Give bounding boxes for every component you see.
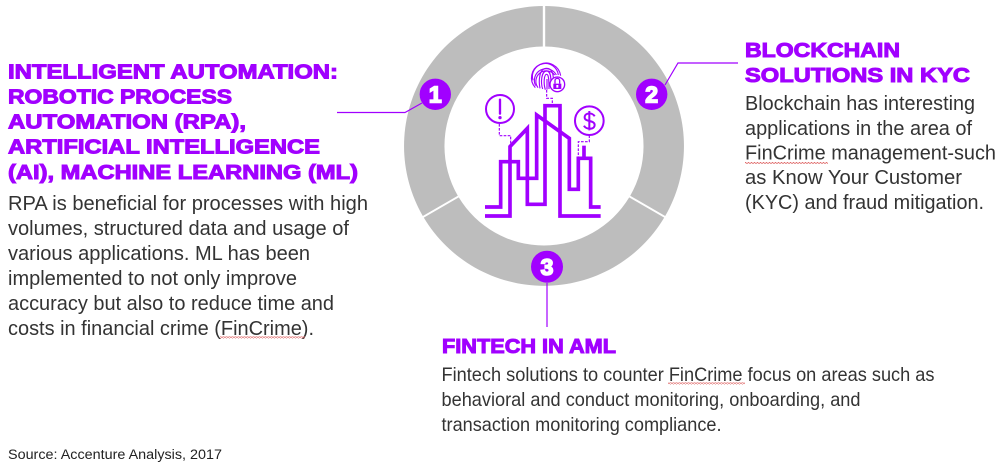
- connector line 2: [665, 63, 738, 85]
- icon: antenna: [578, 146, 589, 158]
- heading: intelligent automation: ARTIFICIAL INTELLIGENCE: [8, 137, 320, 159]
- heading: intelligent automation: INTELLIGENT AUTOMATION:: [8, 61, 338, 83]
- text block: fintech description: transaction monitoring compliance.: [442, 414, 722, 436]
- heading: blockchain solutions: BLOCKCHAIN: [745, 40, 900, 62]
- text block: intelligent automation description: volumes, structured data and usage of: [8, 218, 349, 240]
- central icon: city skyline with security symbols: [485, 63, 604, 216]
- icon: fingerprint with lock: [531, 63, 565, 92]
- icon: alert circle: [486, 95, 514, 123]
- text block: fintech description: [442, 364, 935, 436]
- text block: blockchain description: FinCrime management-such: [745, 142, 996, 164]
- ring diagram: [404, 6, 684, 286]
- connector line 3: [546, 283, 548, 327]
- number badge 2: 2: [645, 82, 658, 108]
- heading: intelligent automation: [8, 61, 358, 184]
- icon: dollar circle: [575, 106, 604, 135]
- text block: blockchain description: as Know Your Customer: [745, 167, 962, 189]
- text block: fintech description: behavioral and conduct monitoring, onboarding, and: [442, 389, 860, 411]
- number badge 3: [531, 251, 563, 283]
- text block: fintech description: Fintech solutions to counter FinCrime focus on areas such as: [442, 364, 935, 386]
- heading: intelligent automation: ROBOTIC PROCESS: [8, 86, 232, 108]
- text block: blockchain description: Blockchain has interesting: [745, 93, 975, 115]
- icon: skyline front outline: [485, 106, 601, 216]
- icon: dashed connectors: [499, 90, 589, 157]
- number badge 2: [636, 79, 667, 110]
- ring segment 1: [404, 6, 543, 216]
- heading: intelligent automation: (AI), MACHINE LEARNING (ML): [8, 162, 358, 184]
- heading: blockchain solutions: [745, 40, 970, 87]
- number badge 1: [420, 79, 451, 110]
- heading: fintech in aml: FINTECH IN AML: [442, 336, 616, 358]
- text block: intelligent automation description: accuracy but also to reduce time and: [8, 293, 334, 315]
- source note: Source: Accenture Analysis, 2017: [8, 447, 222, 463]
- icon: skyline back outline: [485, 115, 601, 207]
- text block: intelligent automation description: [8, 193, 368, 340]
- text block: blockchain description: [745, 93, 996, 214]
- text block: intelligent automation description: various applications. ML has been: [8, 243, 310, 265]
- text block: intelligent automation description: implemented to not only improve: [8, 268, 297, 290]
- ring segment 3: [424, 197, 664, 286]
- heading: blockchain solutions: SOLUTIONS IN KYC: [745, 65, 970, 87]
- heading: intelligent automation: AUTOMATION (RPA),: [8, 111, 246, 133]
- text block: blockchain description: applications in the area of: [745, 118, 972, 140]
- ring segment 2: [545, 6, 684, 216]
- number badge 1: 1: [429, 82, 442, 108]
- connector line 1: [337, 103, 422, 112]
- number badge 3: 3: [541, 254, 553, 280]
- text block: blockchain description: (KYC) and fraud mitigation.: [745, 192, 984, 214]
- text block: intelligent automation description: costs in financial crime (FinCrime).: [8, 318, 314, 340]
- text block: intelligent automation description: RPA is beneficial for processes with high: [8, 193, 368, 215]
